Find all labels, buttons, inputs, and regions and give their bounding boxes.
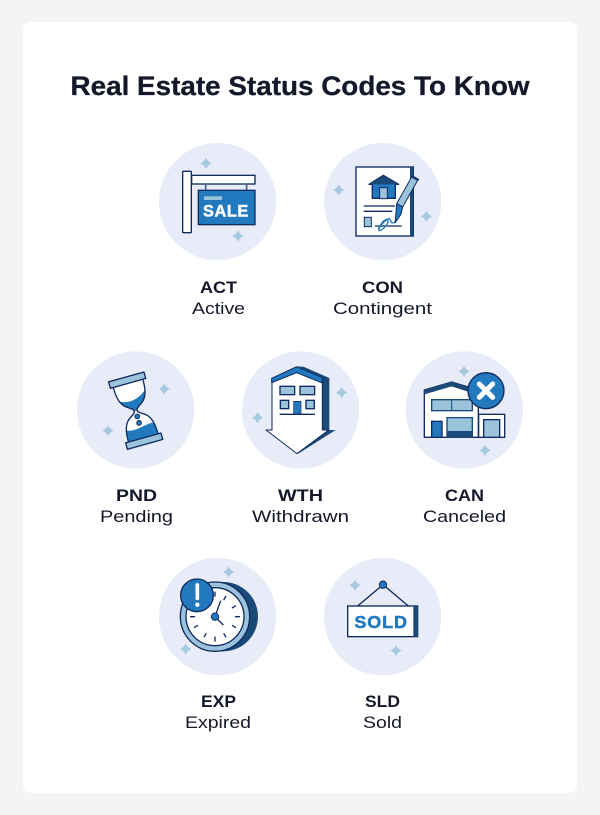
- status: contingent: [324, 143, 441, 318]
- status: expired: [159, 558, 276, 732]
- status: sold: [324, 558, 441, 732]
- label: CAN Canceled: Canceled: [423, 507, 506, 526]
- title: Real Estate Status Codes To Know: [70, 71, 531, 101]
- icon: for sale sign: SALE: [203, 203, 248, 221]
- label: CON Contingent: Contingent: [333, 299, 432, 318]
- label: EXP Expired: Expired: [185, 713, 251, 732]
- icon: house with cancel badge: [406, 351, 523, 469]
- label: PND Pending: Pending: [100, 507, 173, 526]
- label: EXP Expired: [185, 692, 251, 732]
- icon: sold hanging sign: [324, 558, 441, 675]
- label: SLD Sold: [363, 692, 402, 732]
- label: WTH Withdrawn: Withdrawn: [252, 507, 349, 526]
- status: pending: [77, 351, 194, 526]
- status: active: [159, 143, 276, 318]
- icon: clock with alert badge: [159, 558, 276, 675]
- label: CAN Canceled: [423, 486, 506, 526]
- icon: house shaped down arrow: [242, 351, 359, 469]
- status: canceled: [406, 351, 523, 526]
- label: WTH Withdrawn: WTH: [278, 486, 323, 505]
- label: EXP Expired: EXP: [201, 692, 236, 711]
- label: ACT Active: ACT: [200, 278, 238, 297]
- label: ACT Active: Active: [192, 299, 245, 318]
- label: CON Contingent: CON: [362, 278, 403, 297]
- icon: for sale sign: [159, 143, 276, 260]
- status: withdrawn: [242, 351, 359, 526]
- label: PND Pending: PND: [116, 486, 157, 505]
- label: ACT Active: [192, 278, 245, 318]
- label: SLD Sold: Sold: [363, 713, 402, 732]
- icon: sold hanging sign: SOLD: [354, 612, 407, 632]
- label: SLD Sold: SLD: [365, 692, 400, 711]
- label: CON Contingent: [333, 278, 432, 318]
- label: PND Pending: [100, 486, 173, 526]
- icon: contract and pen: [324, 143, 441, 260]
- label: CAN Canceled: CAN: [445, 486, 484, 505]
- label: WTH Withdrawn: [252, 486, 349, 526]
- icon: hourglass: [77, 351, 194, 469]
